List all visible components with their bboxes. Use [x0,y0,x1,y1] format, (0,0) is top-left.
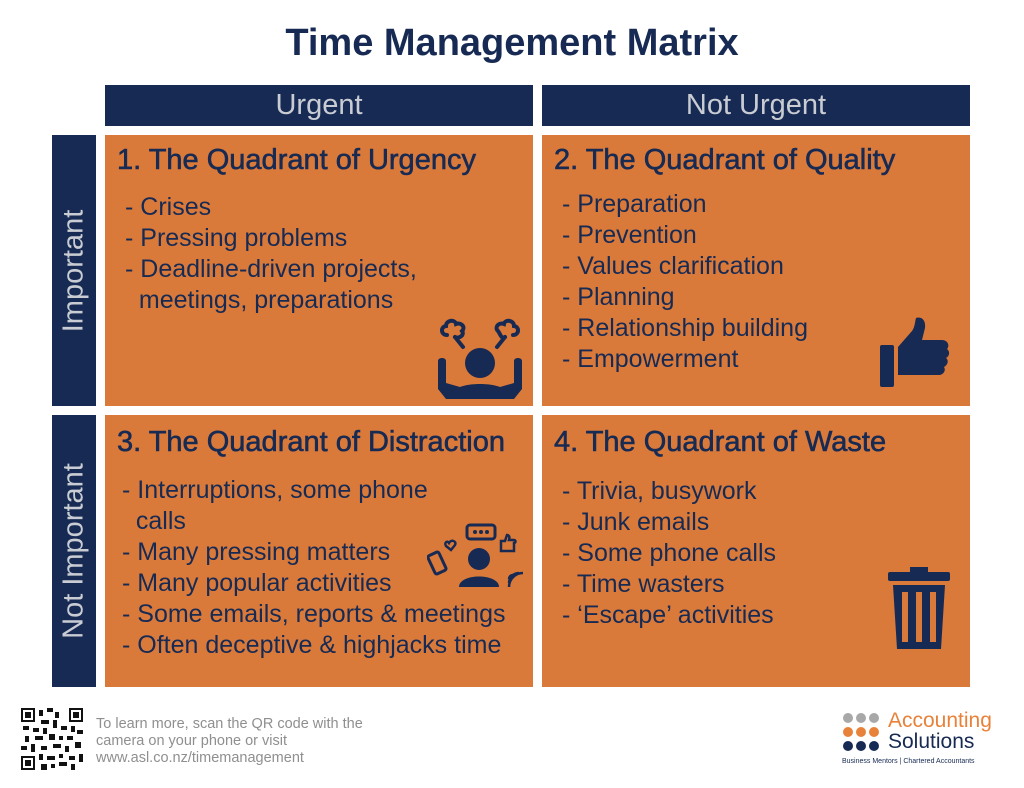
panel: quadrant 4: - Some phone calls [562,539,776,567]
panel: quadrant 1: 1. The Quadrant of Urgency [117,144,476,176]
panel: quadrant 2: - Relationship building [562,314,808,342]
header: not urgent: Not Urgent [686,89,826,121]
panel: quadrant 3: calls [136,507,186,535]
panel: quadrant 4: - Time wasters [562,570,725,598]
panel: quadrant 1: meetings, preparations [139,286,393,314]
logo: Accounting [888,709,992,732]
panel: quadrant 4: - Junk emails [562,508,709,536]
panel: quadrant 1 [105,135,533,406]
footer text [96,716,363,766]
side: important: Important [58,209,90,332]
header: urgent [105,85,533,126]
icon: trash can [888,567,950,649]
icon: stressed person [438,318,522,399]
panel: quadrant 3 [105,415,533,687]
logo: Solutions [888,730,974,753]
panel: quadrant 4: - ‘Escape’ activities [562,601,774,629]
logo [842,709,992,765]
panel: quadrant 2: - Values clarification [562,252,784,280]
panel: quadrant 4 [542,415,970,687]
panel: quadrant 3: - Interruptions, some phone [122,476,428,504]
panel: quadrant 2 [542,135,970,406]
side: not important: Not Important [58,463,90,639]
panel: quadrant 1: - Deadline-driven projects, [125,255,417,283]
panel: quadrant 2: - Planning [562,283,675,311]
header: not urgent [542,85,970,126]
panel: quadrant 4: 4. The Quadrant of Waste [554,426,886,458]
panel: quadrant 2: - Prevention [562,221,697,249]
panel: quadrant 2: - Preparation [562,190,707,218]
panel: quadrant 3: - Some emails, reports & meetings [122,600,505,628]
panel: quadrant 3: - Many popular activities [122,569,392,597]
panel: quadrant 1: - Crises [125,193,211,221]
footer text: camera on your phone or visit [96,733,287,749]
panel: quadrant 3: - Many pressing matters [122,538,390,566]
panel: quadrant 3: - Often deceptive & highjacks time [122,631,501,659]
side: important [52,135,96,406]
footer text: To learn more, scan the QR code with the [96,716,363,732]
panel: quadrant 2: - Empowerment [562,345,738,373]
panel: quadrant 3: 3. The Quadrant of Distraction [117,426,505,458]
logo: Business Mentors | Chartered Accountants [842,758,975,765]
header: urgent: Urgent [275,89,363,121]
icon: QR code [21,708,83,770]
panel: quadrant 4: - Trivia, busywork [562,477,756,505]
title: Time Management Matrix [285,22,739,64]
icon: thumbs up [880,318,950,387]
icon: distracted person [427,524,523,587]
side: not important [52,415,96,687]
panel: quadrant 1: - Pressing problems [125,224,347,252]
footer text: www.asl.co.nz/timemanagement [96,750,304,766]
panel: quadrant 2: 2. The Quadrant of Quality [554,144,895,176]
